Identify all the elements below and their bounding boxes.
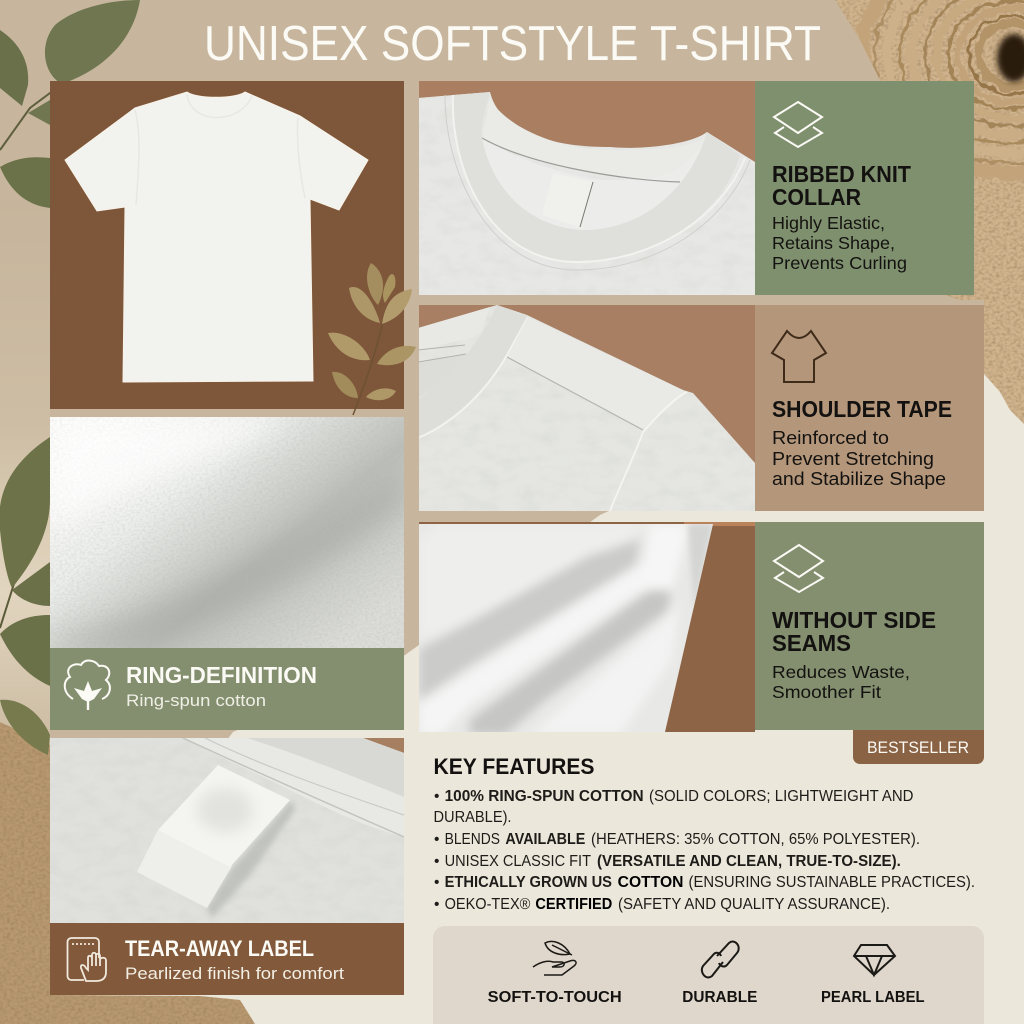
heading: without side seams: WITHOUT SIDE [772, 607, 936, 633]
description: without side seams: Smoother Fit [772, 682, 881, 702]
title: UNISEX SOFTSTYLE T-SHIRT [204, 17, 821, 71]
sprig of dried leaves [328, 263, 416, 415]
key features list: OEKO-TEX® [445, 896, 531, 913]
key features list: UNISEX CLASSIC FIT [445, 853, 591, 870]
description: ribbed knit collar: Highly Elastic, [772, 213, 885, 233]
panel: ring-definition caption [50, 648, 404, 730]
icon: diamond [854, 945, 895, 975]
description: shoulder tape: Prevent Stretching [772, 449, 934, 469]
shoulder tape [511, 318, 684, 412]
description: shoulder tape: Reinforced to [772, 428, 889, 448]
panel: without side seams text [755, 522, 984, 730]
description: shoulder tape [772, 428, 946, 489]
description: ribbed knit collar [772, 213, 907, 273]
label: soft-to-touch: SOFT-TO-TOUCH [488, 989, 622, 1006]
key features list: (SAFETY AND QUALITY ASSURANCE). [618, 896, 890, 913]
heading: key features: KEY FEATURES [434, 754, 594, 779]
key features list: ETHICALLY GROWN US [445, 874, 612, 891]
panel: side photo [419, 522, 755, 735]
label: pearl label: PEARL LABEL [821, 989, 925, 1006]
key features list: DURABLE). [434, 809, 512, 826]
key features list: • [434, 831, 439, 848]
key features list [434, 788, 975, 913]
icon: leaf on hand [533, 941, 576, 975]
t-shirt [65, 92, 368, 382]
twine and burlap top right [830, 0, 1024, 430]
subtext: ring-spun cotton: Ring-spun cotton [126, 692, 266, 710]
panel: attribute strip [433, 926, 984, 1024]
description: shoulder tape: and Stabilize Shape [772, 469, 946, 489]
neck tab [542, 173, 593, 227]
neck rib [497, 305, 500, 306]
panel: collar photo [418, 81, 755, 295]
description: ribbed knit collar: Prevents Curling [772, 253, 907, 273]
collar inner [497, 108, 614, 166]
description: without side seams: Reduces Waste, [772, 662, 910, 682]
leaves top left [0, 0, 140, 208]
panel: shoulder tape text [755, 305, 984, 511]
description: ribbed knit collar: Retains Shape, [772, 233, 895, 253]
key features list: CERTIFIED [535, 896, 612, 913]
subtext: pearlized finish: Pearlized finish for comfort [125, 964, 344, 983]
heading: ribbed knit collar: RIBBED KNIT [772, 161, 911, 187]
panel: fabric close-up [50, 417, 404, 650]
panel: tear-away label photo [50, 738, 404, 923]
icon: t-shirt outline [772, 331, 826, 382]
badge: bestseller [853, 730, 984, 764]
label: durable: DURABLE [682, 989, 758, 1006]
shirt hem with folds [419, 524, 713, 735]
collar band [183, 738, 404, 837]
heading: without side seams: SEAMS [772, 630, 851, 656]
key features list: (ENSURING SUSTAINABLE PRACTICES). [688, 874, 975, 891]
heading: ribbed knit collar [772, 161, 911, 210]
icon: layers [774, 545, 823, 592]
heading: ring-definition: RING-DEFINITION [126, 662, 317, 688]
heading: shoulder tape: SHOULDER TAPE [772, 396, 952, 422]
icon: chain link [702, 942, 739, 977]
key features list: (HEATHERS: 35% COTTON, 65% POLYESTER). [591, 831, 920, 848]
key features list: • [434, 788, 439, 805]
label tab [137, 830, 232, 908]
panel: t-shirt photo [50, 81, 404, 409]
icon: layers [774, 102, 822, 147]
description: without side seams [772, 662, 910, 702]
icon: hand on label [67, 938, 106, 981]
key features list: (VERSATILE AND CLEAN, TRUE-TO-SIZE). [597, 853, 901, 870]
icon: cotton boll [65, 661, 110, 710]
heading: ribbed knit collar: COLLAR [772, 184, 861, 210]
key features list: (SOLID COLORS; LIGHTWEIGHT AND [649, 788, 914, 805]
panel: shoulder photo [418, 305, 755, 511]
key features list: • [434, 896, 439, 913]
heading: tear-away label: TEAR-AWAY LABEL [125, 936, 314, 961]
key features list: • [434, 853, 439, 870]
heading: without side seams [772, 607, 936, 656]
inner neck [419, 307, 490, 343]
leaves middle left [0, 437, 50, 755]
key features list: 100% RING-SPUN COTTON [445, 788, 644, 805]
key features list: COTTON [618, 874, 684, 891]
badge: bestseller: BESTSELLER [867, 738, 969, 757]
panel: ribbed knit collar text [755, 81, 974, 295]
key features list: BLENDS [445, 831, 500, 848]
key features list: AVAILABLE [505, 831, 585, 848]
collar ring [453, 92, 740, 262]
key features list: • [434, 874, 439, 891]
burlap cloth bottom left [0, 722, 255, 1024]
panel: tear-away label caption [50, 923, 404, 995]
